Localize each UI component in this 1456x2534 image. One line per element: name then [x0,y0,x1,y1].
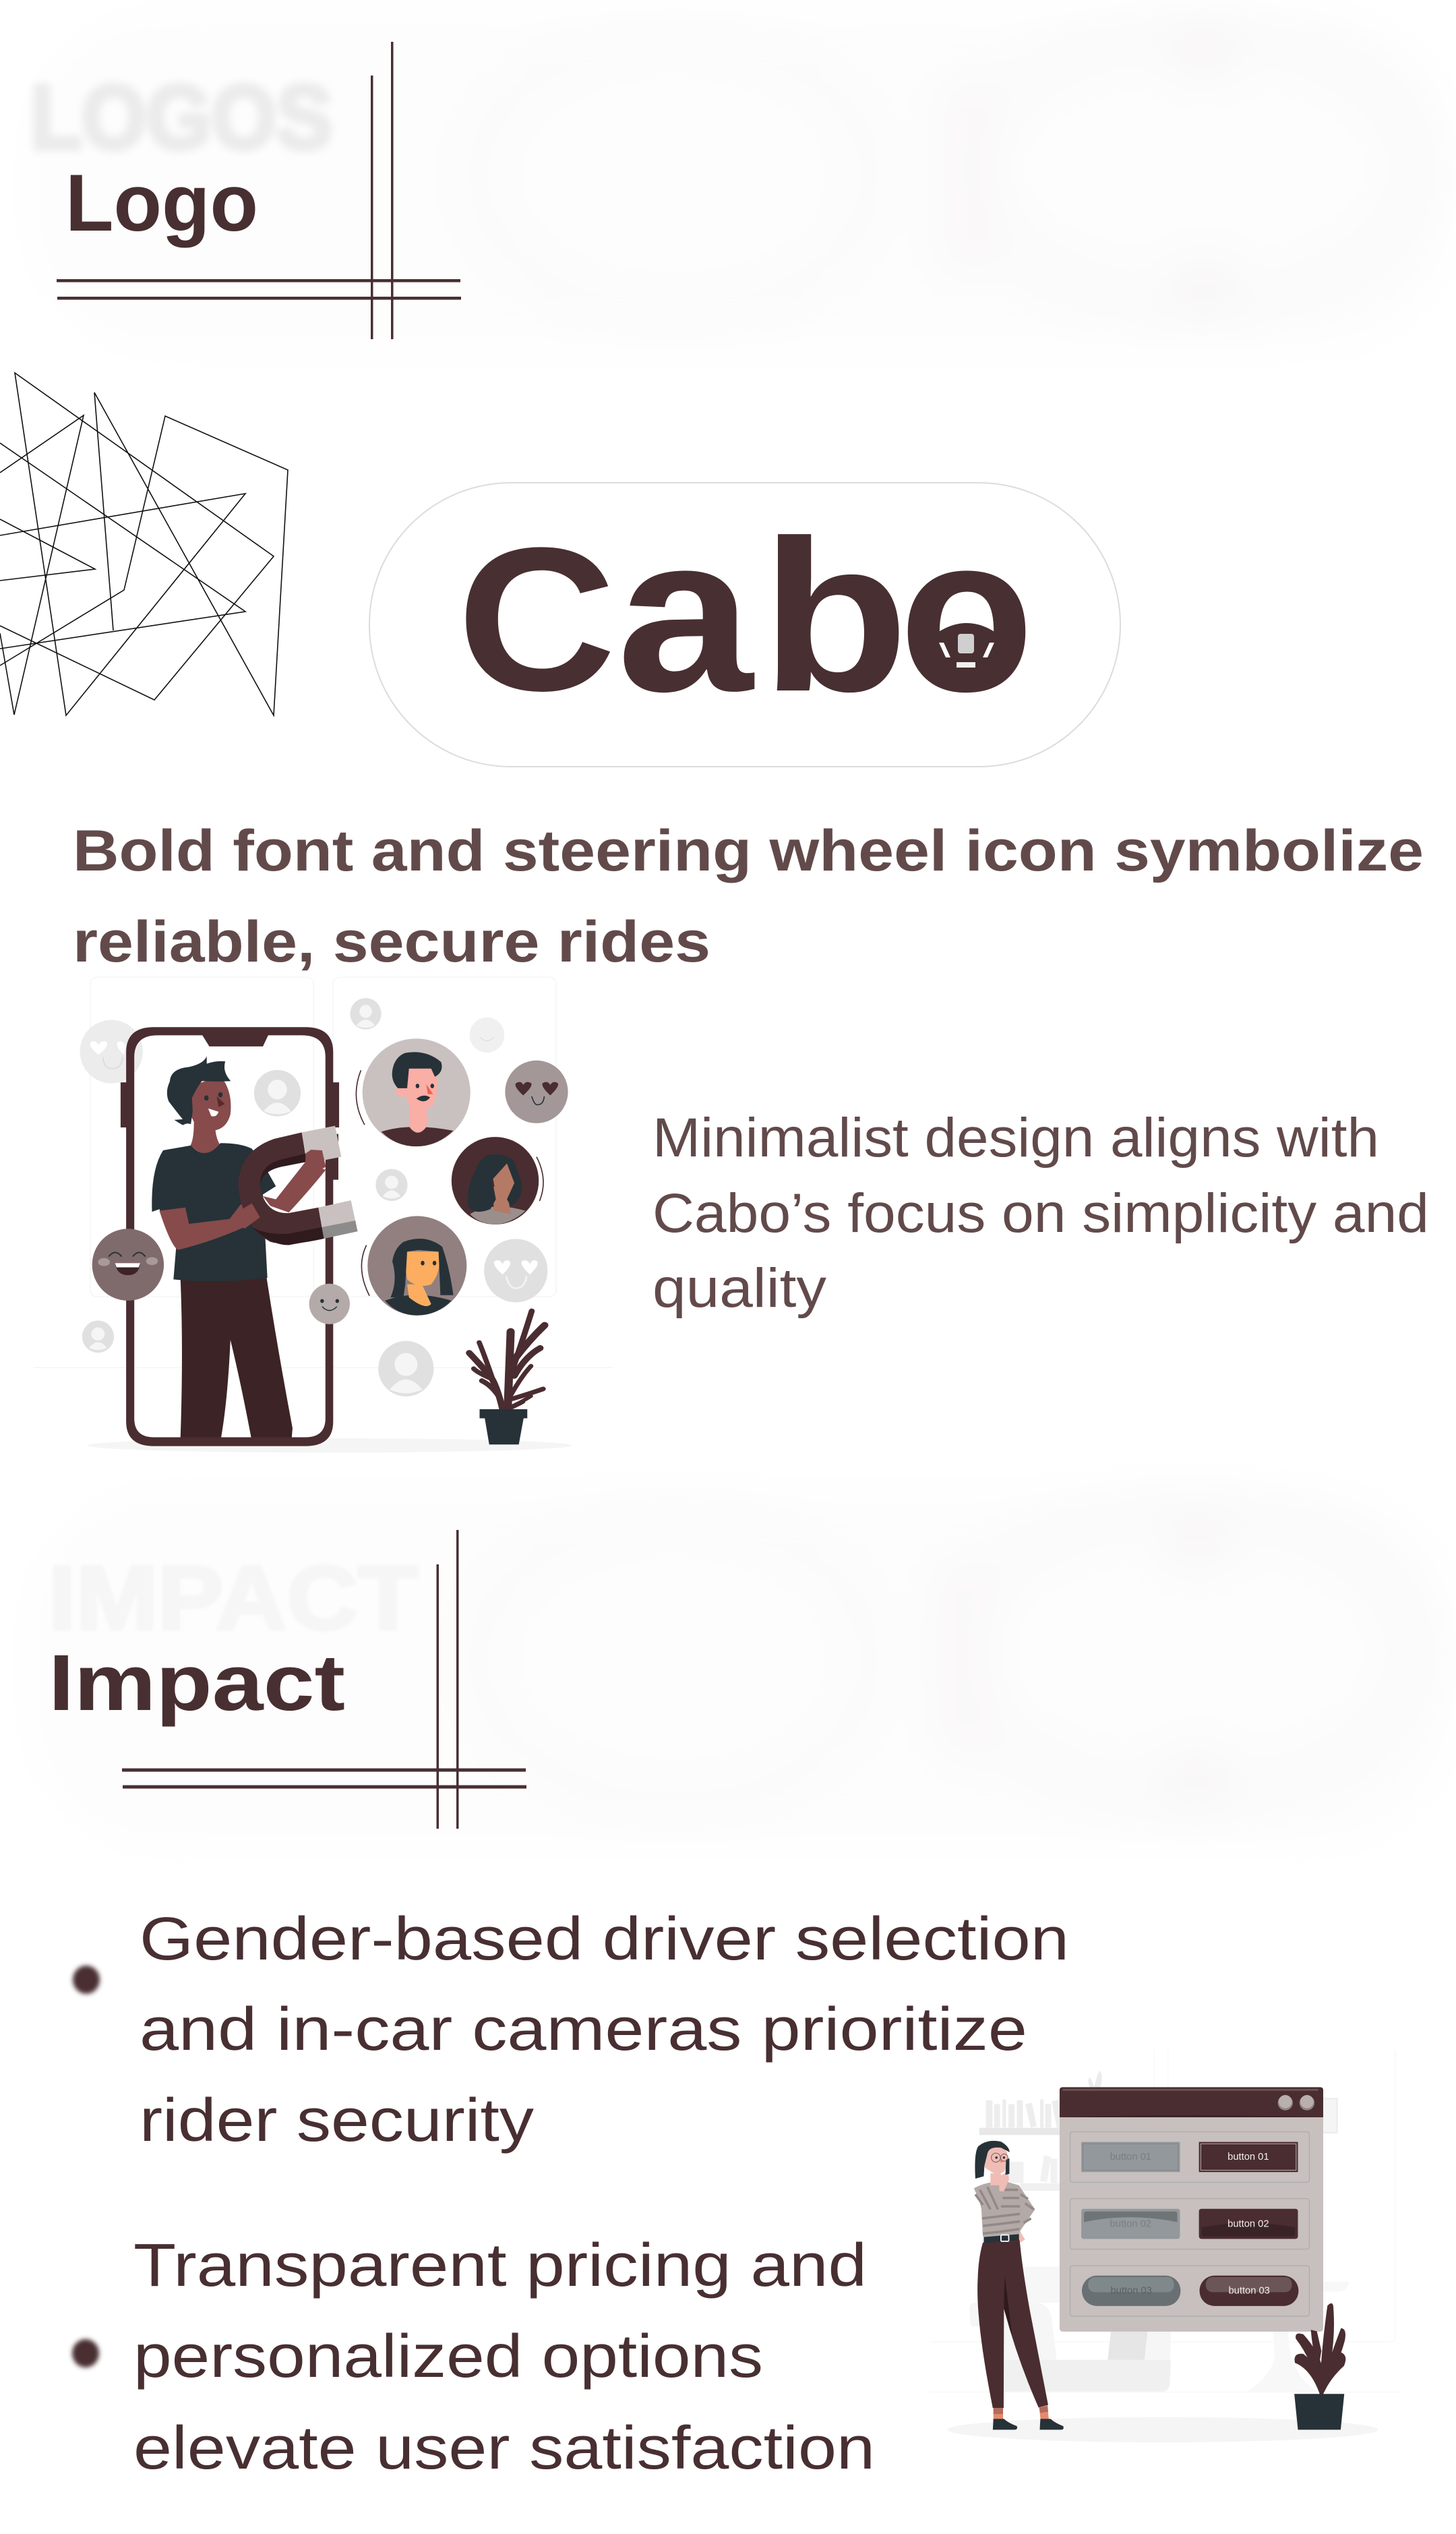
decorative line polygon [0,373,288,715]
impact point one: Gender-based driver selection [140,1906,1069,1973]
ground shadow [948,2417,1378,2442]
ghost emoji: hearts lower [484,1239,547,1302]
row three: button 03 [1228,2286,1270,2297]
frame lines: logo heading [57,42,461,339]
heading: Logo: Logo [65,158,258,248]
emoji: smile [309,1284,350,1324]
logo rationale heading: reliable, secure rides [73,910,710,974]
logo rationale paragraph: Cabo’s focus on simplicity and [653,1183,1429,1244]
illustration: woman reviewing button styles [930,2050,1402,2442]
impact point one: and in-car cameras prioritize [140,1996,1027,2063]
logo wordmark: Cabo [457,489,1034,738]
phone [121,1027,339,1446]
logo rationale paragraph: quality [653,1258,826,1319]
logo pill [369,483,1120,767]
avatar: woman with curly hair [452,1137,539,1225]
motion arcs [356,1070,543,1296]
logo rationale heading [73,819,1424,974]
emoji: laughing [92,1229,164,1301]
row one [1070,2131,1309,2182]
heading: Impact: Impact [49,1639,345,1728]
row two [1070,2199,1309,2249]
impact point two: Transparent pricing and [133,2232,867,2299]
impact point one: rider security [140,2087,534,2154]
ghost user icons [82,998,504,1396]
impact point two: elevate user satisfaction [133,2415,875,2482]
avatar: man [363,1038,471,1146]
blurred background: logo section [27,13,1456,351]
bullet dot one [73,1966,100,1994]
background room [930,2050,1402,2392]
logo wordmark: Cabo: a [617,489,754,738]
frame lines: impact heading [122,1530,526,1829]
plant [1294,2303,1345,2429]
row three [1070,2266,1309,2316]
logo rationale paragraph: Minimalist design aligns with [653,1107,1379,1169]
row two: button 02 [1227,2218,1269,2229]
impact point two [133,2232,875,2482]
icon: steering wheel [936,623,998,678]
background panels [34,977,613,1367]
impact point one [140,1906,1069,2154]
ground shadow [88,1438,572,1452]
emoji: hearts [505,1061,568,1123]
logo wordmark: Cabo: o [899,489,1034,738]
logo wordmark: Cabo: C [457,506,616,734]
magnet [231,1126,357,1245]
ghost heart emoji [80,1020,143,1084]
bullet dot two [72,2339,99,2367]
row three: button 03 [1110,2286,1152,2297]
ghost heading: LOGO: LOGOS [30,67,332,168]
plant [469,1311,545,1444]
blurred background: impact section [27,1490,1456,1848]
ghost heading: IMPACT: IMPACT [49,1548,418,1649]
row two: button 02 [1110,2218,1151,2229]
logo rationale heading: Bold font and steering wheel icon symbolize [73,819,1424,883]
logo rationale paragraph [653,1107,1429,1319]
impact point two: personalized options [133,2323,763,2390]
man [152,1056,326,1438]
illustration: man with magnet attracting users [34,977,613,1452]
woman [974,2141,1064,2429]
row one: button 01 [1227,2152,1269,2162]
window [1060,2087,1323,2332]
row one: button 01 [1110,2152,1151,2162]
logo wordmark: Cabo: b [761,495,909,736]
avatar: woman with dark hair [367,1216,466,1316]
